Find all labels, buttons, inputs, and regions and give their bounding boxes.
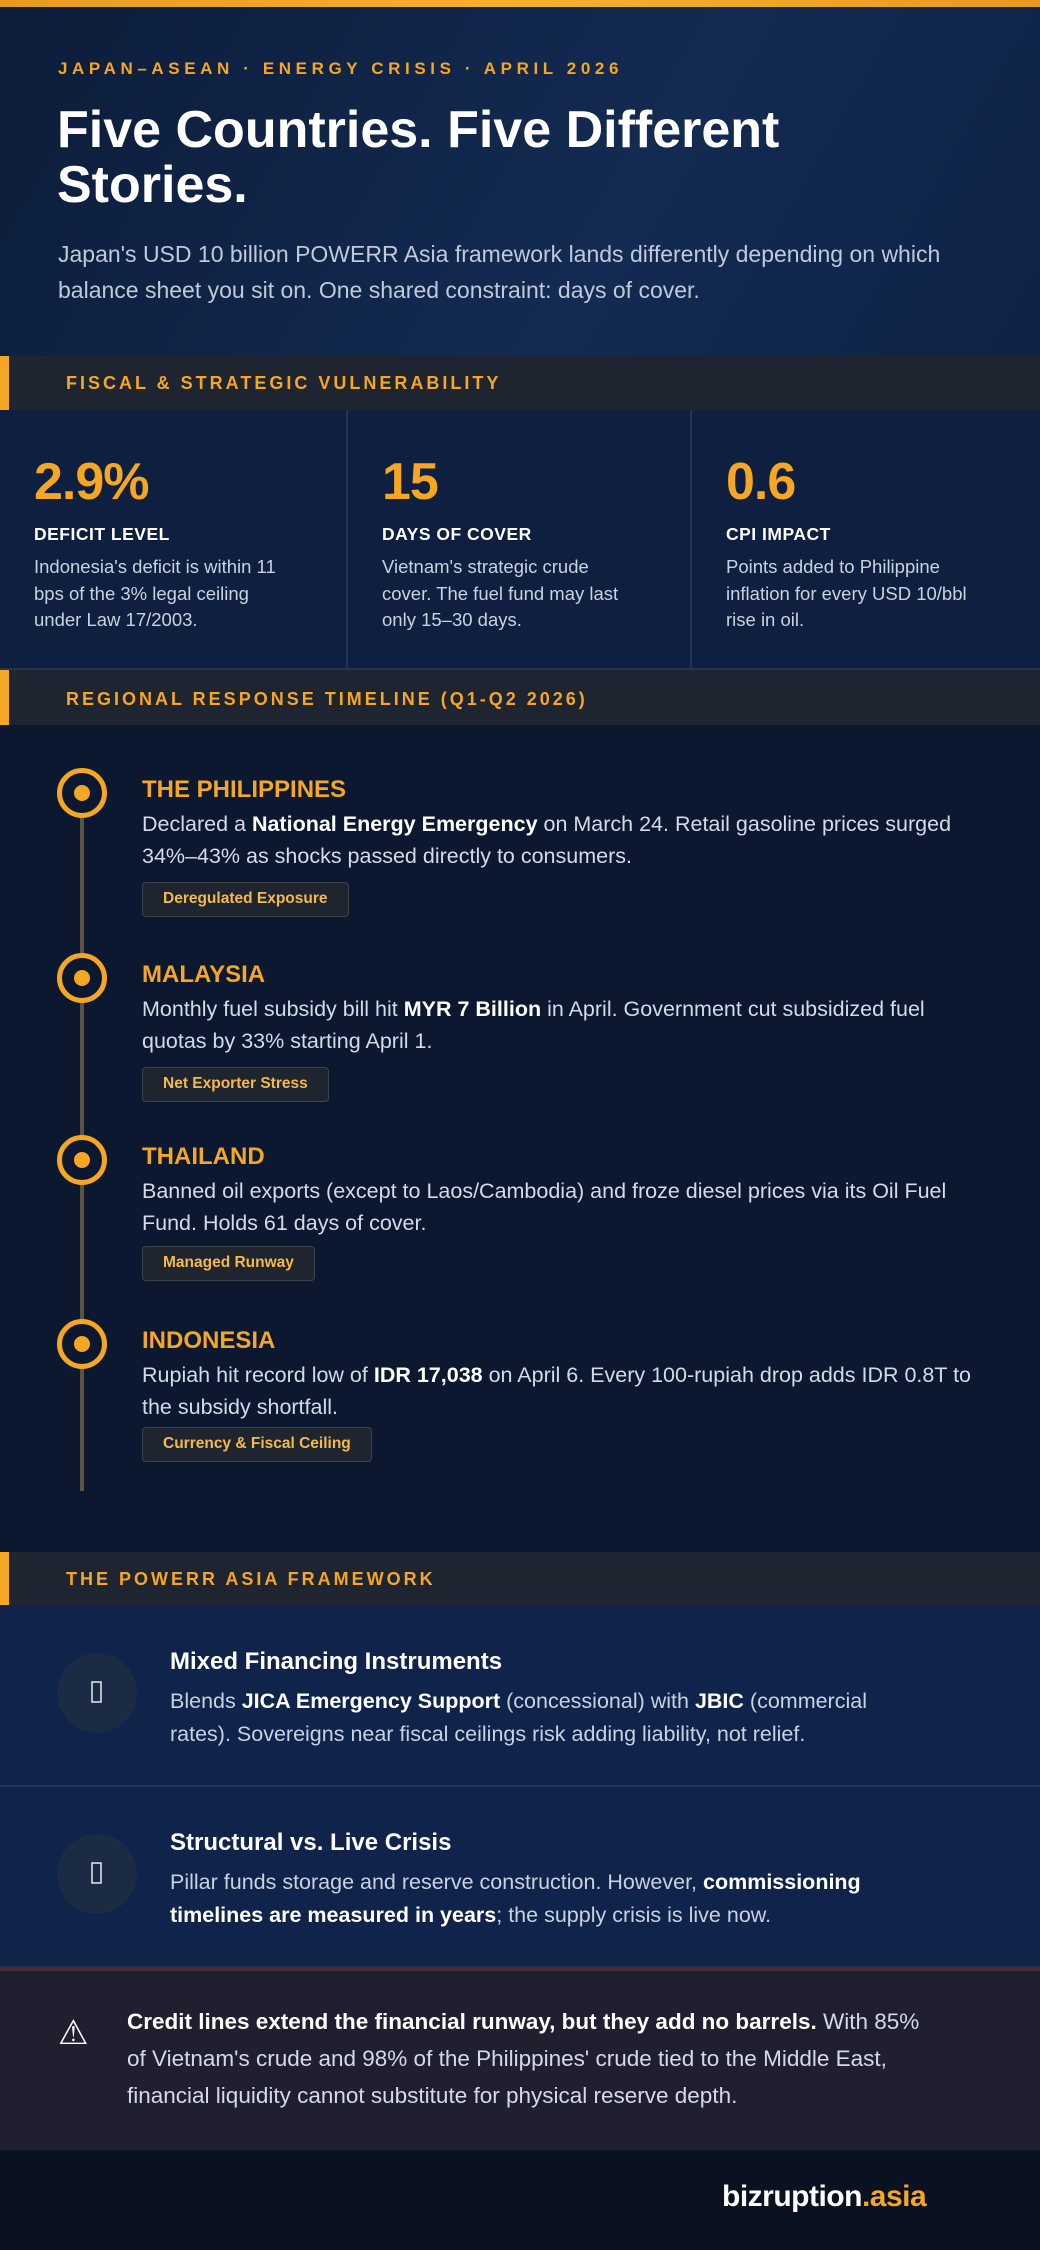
top gold bar (0, 0, 1040, 7)
item: thailand: THAILAND (142, 1143, 265, 1170)
footer (0, 2150, 1040, 2250)
header panel (0, 7, 1040, 356)
stat: deficit: DEFICIT LEVEL (34, 524, 170, 544)
item: philippines (57, 768, 951, 917)
stat: cpi (692, 410, 1040, 668)
badge (142, 1067, 329, 1102)
section header: fiscal: FISCAL & STRATEGIC VULNERABILITY (66, 373, 501, 393)
item: philippines: Declared a National Energy Emergency on March 24. Retail gasoline prices surged (142, 812, 951, 836)
section header: fiscal (0, 356, 1040, 410)
callout (0, 1968, 1040, 2150)
card: structural: timelines are measured in years; the supply crisis is live now. (170, 1903, 771, 1927)
item: indonesia: Rupiah hit record low of IDR 17,038 on April 6. Every 100-rupiah drop adds IDR 0.8T to (142, 1363, 971, 1387)
stat: cpi: Points added to Philippine (726, 556, 940, 577)
stat: cpi: CPI IMPACT (726, 524, 831, 544)
item: malaysia: Monthly fuel subsidy bill hit MYR 7 Billion in April. Government cut subsidized fuel (142, 997, 925, 1021)
section header: timeline (0, 670, 1040, 725)
card: mixed financing: rates). Sovereigns near fiscal ceilings risk adding liability, not relief. (170, 1722, 805, 1746)
badge: Net Exporter Stress (163, 1075, 308, 1092)
stat: cpi: inflation for every USD 10/bbl (726, 582, 967, 604)
stat: days of cover (348, 410, 690, 668)
logo: bizruption.asia (722, 2180, 926, 2213)
item: indonesia: the subsidy shortfall. (142, 1395, 338, 1419)
item: malaysia (57, 953, 925, 1102)
title: Stories. (57, 156, 248, 214)
stat: days of cover: Vietnam's strategic crude (382, 556, 589, 577)
callout text: Credit lines extend the financial runway, but they add no barrels. With 85% (127, 2009, 919, 2034)
icon: warning: ⚠ (58, 2014, 88, 2052)
card: structural: Pillar funds storage and reserve construction. However, commissioning (170, 1870, 861, 1894)
badge: Deregulated Exposure (163, 890, 328, 907)
item: indonesia (57, 1319, 971, 1462)
stat: deficit (0, 410, 346, 668)
card: structural: Structural vs. Live Crisis (170, 1829, 451, 1856)
timeline panel (0, 725, 1040, 1552)
stat: cpi: 0.6 (726, 453, 795, 511)
badge (142, 882, 349, 917)
badge (142, 1427, 372, 1462)
card: mixed financing: Mixed Financing Instruments (170, 1648, 502, 1675)
stat: days of cover: 15 (382, 453, 438, 511)
card: mixed financing (0, 1605, 1040, 1787)
callout text: of Vietnam's crude and 98% of the Philippines' crude tied to the Middle East, (127, 2046, 887, 2071)
card: mixed financing: Blends JICA Emergency Support (concessional) with JBIC (commercial (170, 1689, 867, 1713)
icon (57, 1653, 137, 1733)
section header: powerr (0, 1552, 1040, 1605)
stat: deficit: bps of the 3% legal ceiling (34, 582, 249, 604)
stat: deficit: under Law 17/2003. (34, 609, 198, 630)
item: thailand: Banned oil exports (except to Laos/Cambodia) and froze diesel prices via its Oil Fuel (142, 1179, 946, 1203)
stat: cpi: rise in oil. (726, 609, 804, 630)
stat: days of cover: cover. The fuel fund may last (382, 582, 618, 604)
item: malaysia: MALAYSIA (142, 961, 265, 988)
callout text: financial liquidity cannot substitute for physical reserve depth. (127, 2083, 737, 2108)
section header: timeline: REGIONAL RESPONSE TIMELINE (Q1-Q2 2026) (66, 689, 588, 709)
subtitle: Japan's USD 10 billion POWERR Asia framework lands differently depending on which (58, 241, 940, 267)
badge (142, 1246, 315, 1281)
stats panel (0, 410, 1040, 670)
section header: powerr: THE POWERR ASIA FRAMEWORK (66, 1569, 436, 1589)
stat: days of cover: only 15–30 days. (382, 609, 522, 630)
badge: Managed Runway (163, 1254, 294, 1271)
item: thailand: Fund. Holds 61 days of cover. (142, 1211, 426, 1235)
stat: deficit: Indonesia's deficit is within 11 (34, 556, 276, 577)
timeline line (80, 793, 84, 1491)
item: philippines: 34%–43% as shocks passed directly to consumers. (142, 844, 632, 868)
stat: deficit: 2.9% (34, 453, 149, 511)
title (57, 101, 779, 214)
item: philippines: THE PHILIPPINES (142, 776, 346, 803)
icon (57, 1834, 137, 1914)
subtitle: balance sheet you sit on. One shared constraint: days of cover. (58, 277, 700, 303)
item: indonesia: INDONESIA (142, 1327, 275, 1354)
badge: Currency & Fiscal Ceiling (163, 1435, 351, 1452)
card: structural (0, 1787, 1040, 1968)
stat: days of cover: DAYS OF COVER (382, 524, 532, 544)
callout text (127, 2009, 919, 2108)
title: Five Countries. Five Different (57, 101, 779, 159)
item: thailand (57, 1135, 946, 1281)
eyebrow: JAPAN–ASEAN · ENERGY CRISIS · APRIL 2026 (58, 59, 623, 78)
subtitle (58, 241, 940, 303)
item: malaysia: quotas by 33% starting April 1. (142, 1029, 432, 1053)
